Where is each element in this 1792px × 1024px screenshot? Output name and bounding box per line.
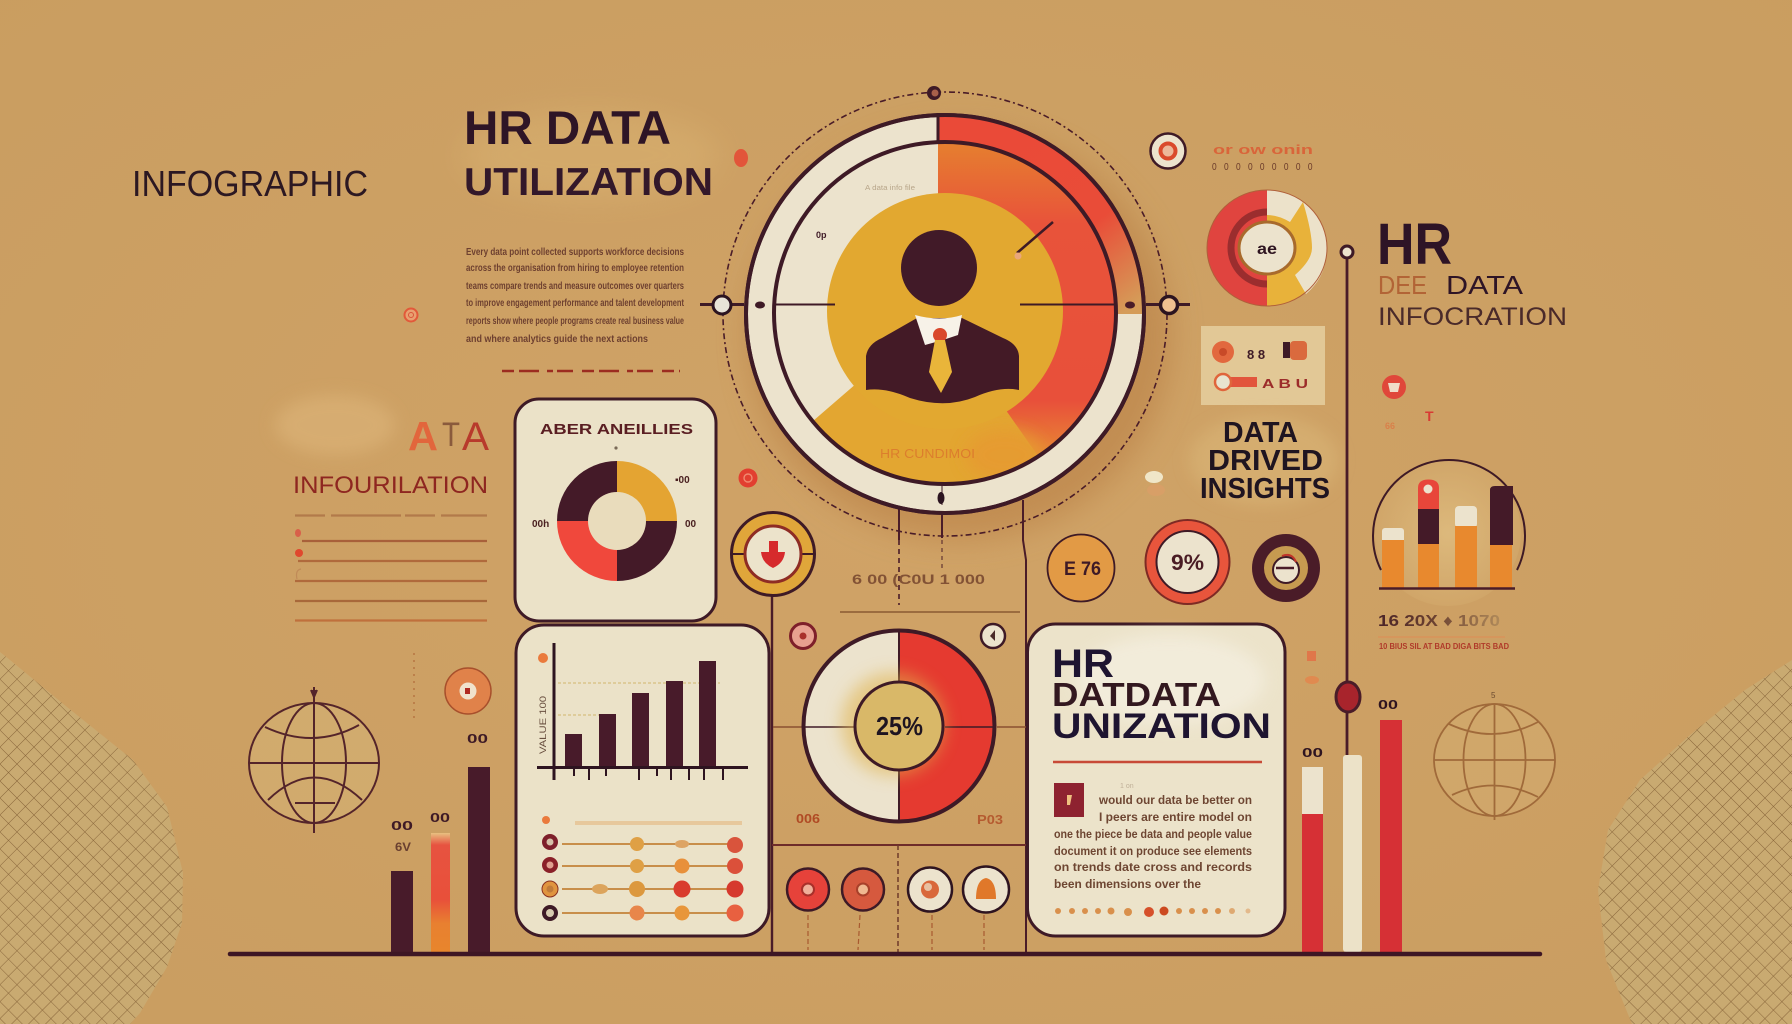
icon: small red circle	[1382, 375, 1406, 399]
mesh: bottom left	[0, 652, 183, 1024]
donut labels: 00	[685, 519, 697, 530]
icon: cream blob	[1145, 471, 1165, 496]
panel: main person gauge	[700, 113, 1190, 513]
bar labels: right: 00	[1378, 697, 1398, 712]
text: chart caption: 16 20X ♦ 1070	[1378, 613, 1500, 630]
node: right	[1160, 296, 1178, 314]
bar labels: left: 00	[430, 810, 450, 825]
heading: hr data utilization: UTILIZATION	[464, 161, 713, 204]
card body text: would our data be better on	[1098, 795, 1252, 807]
text block: left intro: teams compare trends and measure outcomes over quarters	[466, 280, 684, 292]
heading: data infoutilization: A	[462, 415, 489, 459]
heading: hr data infocration	[1377, 212, 1567, 331]
icon: small orange marks	[1305, 651, 1319, 684]
bar labels: left: 00	[391, 818, 413, 833]
connector lines below main ring	[772, 500, 1026, 954]
panel: small legend box	[1201, 326, 1325, 405]
text: chart caption: 10 BIUS SIL AT BAD DIGA BITS BAD	[1379, 641, 1509, 651]
text block: left intro: reports show where people programs create real business value	[466, 315, 684, 327]
panel: bar chart card	[516, 625, 769, 936]
heading: data driven insights	[1189, 415, 1339, 505]
bar labels: right	[1302, 697, 1398, 760]
gauge: cream segment	[774, 142, 938, 421]
bars: left baseline group	[391, 767, 490, 954]
text: top right caption: or ow onin	[1213, 142, 1313, 157]
text block: left intro: to improve engagement performance and talent development	[466, 297, 684, 309]
icon: small pink ring	[790, 624, 816, 648]
icon: dark ring circle	[1252, 534, 1320, 602]
icons: bottom row circles	[787, 866, 1009, 950]
text: small red marks: 66	[1385, 421, 1395, 431]
text: center caption: 6 00 (C0U 1 000	[852, 571, 985, 587]
node: left	[713, 296, 731, 314]
donut labels	[532, 475, 697, 530]
heading: data driven insights: DRIVED	[1208, 445, 1323, 477]
bar labels: left: 6V	[395, 840, 411, 854]
text: small red marks: T	[1425, 408, 1434, 424]
gauge: red segment	[938, 142, 1115, 456]
panel: donut card	[515, 399, 716, 621]
card heading	[1052, 642, 1271, 746]
gauge: small labels	[816, 185, 975, 461]
text block: left intro	[466, 246, 684, 345]
icon: red circle	[787, 868, 829, 910]
panel: small legend box: 8 8	[1247, 347, 1265, 362]
slider row 3	[542, 880, 744, 898]
dotted progress	[1055, 906, 1250, 917]
bar chart: VALUE 100	[538, 696, 548, 754]
main ring: shadow	[748, 130, 1172, 540]
donut labels: 00h	[532, 519, 549, 530]
card title: ABER ANEILLIES	[540, 421, 693, 438]
gauge: axis lines	[700, 304, 1190, 505]
heading: data infoutilization: T	[442, 416, 460, 454]
icon: cream circle one	[908, 868, 952, 912]
mesh: bottom right	[1598, 660, 1792, 1024]
card body text: document it on produce see elements	[1054, 846, 1252, 858]
icon: orange badge	[445, 668, 491, 714]
heading: data infoutilization: A	[408, 413, 438, 459]
donut hub	[855, 682, 943, 770]
icon: small top right ring	[1150, 134, 1186, 168]
icon: red value circle: 9%	[1171, 550, 1204, 575]
icon: small cream ring	[981, 624, 1005, 648]
icon: orange red circle	[842, 868, 884, 910]
panel: small legend box: A B U	[1262, 376, 1308, 391]
text: top right caption: 0 0 0 0 0 0 0 0 0	[1212, 162, 1315, 173]
card heading: UNIZATION	[1052, 707, 1271, 746]
chart: circular bar chart	[1373, 460, 1525, 606]
card body text: on trends date cross and records	[1054, 862, 1252, 874]
node: top	[927, 86, 941, 100]
bar labels: left	[391, 731, 488, 854]
text block: left intro: and where analytics guide the next actions	[466, 333, 648, 345]
donut labels	[796, 811, 1003, 827]
icon: small left ring	[404, 308, 418, 322]
heading: hr data infocration: DEE	[1378, 270, 1427, 300]
bar labels: left: 00	[467, 731, 488, 746]
heading: data driven insights: INSIGHTS	[1200, 473, 1330, 505]
chart: small multi ring donut: ae	[1257, 241, 1277, 258]
icon: target ring	[732, 512, 814, 596]
text block: left intro: across the organisation from hiring to employee retention	[466, 262, 684, 274]
icon: cream circle two	[963, 866, 1009, 912]
gauge: yellow centre	[827, 193, 1063, 429]
gauge: outer ring	[746, 115, 1144, 513]
gauge: needle	[1014, 222, 1053, 260]
icon: person	[866, 230, 1019, 403]
slider row 2	[542, 857, 743, 874]
donut labels: 006	[796, 811, 820, 826]
text: chart caption	[1378, 613, 1509, 651]
icon: red square	[1054, 783, 1084, 817]
card body text: one the piece be data and people value	[1054, 829, 1252, 841]
gauge: small labels: 0p	[816, 230, 827, 240]
card body text: 1 on	[1120, 783, 1134, 790]
heading: hr data infocration: INFOCRATION	[1378, 303, 1567, 331]
text: top right caption	[1212, 142, 1315, 173]
gauge: red fade into yellow	[973, 424, 1044, 474]
text: small red marks	[1385, 408, 1434, 431]
heading: hr data infocration: HR	[1377, 212, 1452, 277]
title: infographic: INFOGRAPHIC	[132, 163, 368, 204]
heading: data driven insights: DATA	[1223, 417, 1298, 449]
donut value: 25%	[876, 711, 923, 741]
baseline	[230, 952, 1540, 956]
card body text	[1054, 783, 1252, 891]
icon: left globe	[249, 687, 379, 833]
icon: orange value circle: E 76	[1064, 559, 1101, 580]
heading: hr data infocration: DATA	[1446, 270, 1524, 300]
node: bottom	[938, 492, 944, 504]
card heading: DATDATA	[1052, 676, 1221, 713]
donut labels: P03	[977, 812, 1003, 827]
slider row 4	[542, 904, 744, 922]
slider list	[542, 816, 744, 922]
bar labels: right: 00	[1302, 745, 1323, 760]
gauge: inner disc	[774, 142, 1116, 484]
chart: small multi ring donut	[1207, 190, 1327, 306]
main dashed ring	[723, 92, 1167, 536]
donut chart	[557, 461, 677, 581]
icon: red value circle	[1146, 520, 1230, 604]
icon: red oval	[734, 149, 748, 167]
slider row 1	[542, 834, 743, 853]
icon: orange value circle	[1048, 534, 1114, 602]
vertical timeline	[1336, 246, 1360, 755]
heading: hr data utilization: HR DATA	[464, 101, 671, 154]
gauge: ring strokes	[746, 113, 1144, 513]
icon: right globe	[1434, 704, 1555, 820]
bar chart	[537, 643, 748, 780]
gauge: small labels: HR CUNDIMOI	[880, 446, 975, 461]
bars: right baseline group	[1302, 720, 1402, 954]
divider: red dashes	[502, 370, 680, 372]
panel: hr card	[1028, 624, 1285, 936]
icon: red dot	[738, 468, 758, 488]
gauge: small labels: A data info file	[865, 185, 915, 192]
heading: data infoutilization: INFOURILATION	[293, 472, 488, 499]
text block: left intro: Every data point collected supports workforce decisions	[466, 246, 684, 258]
card heading: HR	[1052, 642, 1114, 686]
heading: hr data utilization	[460, 101, 720, 204]
gauge: red outer segment	[938, 115, 1144, 314]
list: left ruled lines	[295, 516, 487, 620]
dotted note	[413, 653, 415, 723]
heading: data infoutilization	[275, 395, 489, 499]
donut labels: ▪00	[675, 475, 690, 486]
panel: percent donut	[802, 630, 994, 822]
card body text: I peers are entire model on	[1099, 812, 1252, 824]
globe label: 5	[1491, 691, 1496, 700]
card body text: been dimensions over the	[1054, 879, 1201, 891]
